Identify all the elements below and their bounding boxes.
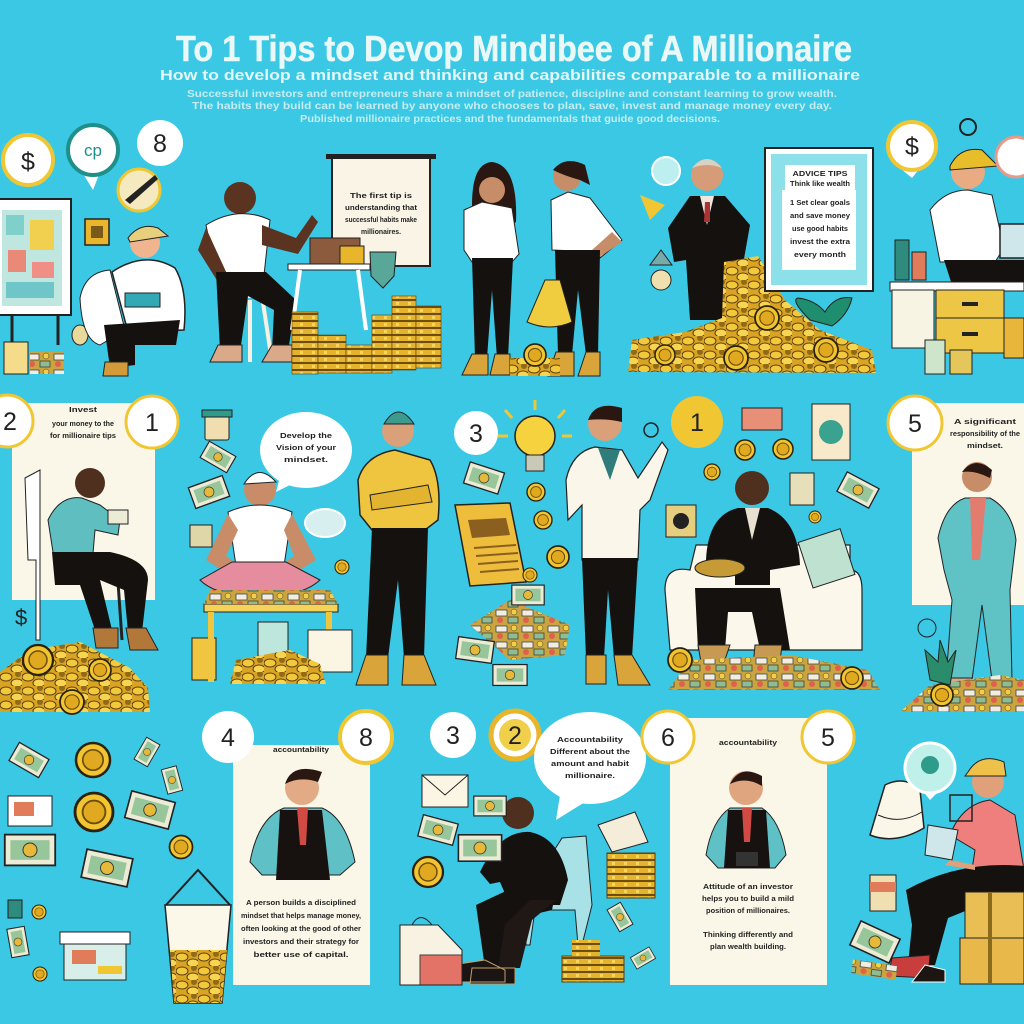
coins near women <box>510 344 560 376</box>
money around sofa <box>666 404 880 690</box>
panel: row 2 tip 1, reading man on chair <box>0 395 178 650</box>
table with coins <box>192 590 352 684</box>
badge: 5 <box>802 711 854 763</box>
flipchart with tip text: successful habits make <box>345 217 417 224</box>
desk with drawers <box>890 240 1024 374</box>
badge: 1 yellow <box>644 396 723 448</box>
badge: number 8: 8 <box>153 130 167 158</box>
badge: 3 row 3: 3 <box>446 722 460 750</box>
person: man in vest with phone <box>706 771 786 868</box>
person: man in vest <box>250 769 355 880</box>
person: man pointing on stool <box>198 182 318 362</box>
newspaper <box>455 503 526 586</box>
speech bubble: row 2: Develop the <box>280 433 332 440</box>
intro paragraph: Successful investors and entrepreneurs share a mindset of patience, discipline and constant learning to grow wealth. <box>187 88 837 100</box>
panel heading: accountability <box>719 740 777 747</box>
badge: 5 <box>888 396 942 450</box>
person: man in yellow sweater <box>356 412 439 685</box>
flipchart with tip text <box>326 154 436 266</box>
panel text: helps you to build a mild <box>702 896 794 903</box>
shopping bag <box>400 918 462 985</box>
badge: dollar: $ <box>21 148 35 176</box>
panel: row 3 tip 5 <box>642 711 854 985</box>
panel text: position of millionaires. <box>706 908 790 915</box>
panel text: mindset that helps manage money, <box>241 913 361 920</box>
panel: row 2 tip 5, man in teal suit <box>888 396 1024 690</box>
panel text: Thinking differently and <box>703 932 793 939</box>
plants and pile: right <box>900 619 1024 712</box>
coin pile with plant <box>628 256 876 373</box>
poster with checklist: Think like wealth <box>790 181 850 188</box>
table with books and shield <box>288 238 396 330</box>
badge: 5: 5 <box>908 410 922 438</box>
badge: speech coin <box>68 125 118 190</box>
person: seated man in suit <box>452 797 592 984</box>
intro paragraph: Published millionaire practices and the fundamentals that guide good decisions. <box>300 113 720 125</box>
panel: row 3 tip 8 <box>202 711 392 985</box>
badge: 2: 2 <box>3 408 17 436</box>
speech bubble: row 2: Vision of your <box>276 445 336 452</box>
panel text: plan wealth building. <box>710 944 786 951</box>
badge: 4: 4 <box>221 724 235 752</box>
panel text: Attitude of an investor <box>703 884 793 891</box>
person: man with laptop at desk <box>930 149 1024 290</box>
chart board <box>0 199 71 345</box>
panel text <box>950 419 1020 450</box>
flipchart with tip text: understanding that <box>345 205 418 212</box>
coin stacks <box>292 296 441 374</box>
speech bubble: row 2: mindset. <box>284 457 328 464</box>
badge: 2 <box>0 395 33 447</box>
bucket of coins <box>165 870 231 1003</box>
storage box <box>60 932 130 980</box>
badge: 6 <box>642 711 694 763</box>
subtitle: How to develop a mindset and thinking and capabilities comparable to a millionaire <box>160 67 860 84</box>
panel text: better use of capital. <box>254 952 349 959</box>
person: man in black suit <box>668 159 750 320</box>
person: seated man in cap <box>80 226 185 376</box>
badges: top right <box>888 119 1024 178</box>
badge: 8: 8 <box>359 724 373 752</box>
intro paragraph: The habits they build can be learned by anyone who chooses to plan, save, invest and manage money every day. <box>192 100 832 112</box>
badge: 3: 3 <box>469 420 483 448</box>
badge: 2 yellow ring <box>491 711 539 759</box>
coin pile: row 2 left <box>0 605 150 714</box>
badge: 2 yellow ring: 2 <box>508 722 522 750</box>
panel text: investors and their strategy for <box>243 939 359 946</box>
panel text <box>50 407 116 440</box>
badge: 8 <box>340 711 392 763</box>
icon: lightbulb <box>498 400 572 471</box>
panel text: for millionaire tips <box>50 433 116 440</box>
poster with checklist: 1 Set clear goals <box>790 200 850 207</box>
badge: 5: 5 <box>821 724 835 752</box>
badges: top right: $ <box>905 133 919 161</box>
poster with checklist: every month <box>794 252 846 259</box>
money: row 3 left <box>5 737 192 981</box>
person: woman with long hair <box>462 162 519 375</box>
intro paragraph <box>187 88 837 125</box>
lamp, badge and desk items <box>850 743 972 980</box>
stool <box>226 296 272 362</box>
poster with checklist <box>765 148 873 291</box>
panel text: A person builds a disciplined <box>246 900 356 907</box>
flipchart with tip text: millionaires. <box>361 229 401 236</box>
stacked boxes <box>960 892 1024 984</box>
badge: 1 <box>126 396 178 448</box>
person: man on boxes with laptop <box>888 759 1024 982</box>
badge: 6: 6 <box>661 724 675 752</box>
badge: dollar <box>3 135 53 185</box>
person: man in white sweater <box>566 406 668 685</box>
floating bills <box>188 410 349 574</box>
panel text: mindset. <box>967 443 1003 450</box>
speech bubble: row 3: Accountability <box>557 737 623 744</box>
poster with checklist: invest the extra <box>790 239 850 246</box>
small icons above pile <box>640 157 680 290</box>
speech bubble: row 3: Different about the <box>550 749 630 756</box>
poster with checklist: ADVICE TIPS <box>792 171 848 178</box>
badge: 4 <box>202 711 254 763</box>
badge: 3 <box>454 411 498 455</box>
badge: number 8 <box>137 120 183 166</box>
panel text: Invest <box>69 407 98 414</box>
person: man in teal suit <box>938 462 1016 690</box>
coin pile: row 2 left: $ <box>15 605 27 630</box>
person: cross-legged man on table <box>200 472 320 595</box>
title: To 1 Tips to Devop Mindibee of A Millionaire <box>176 28 852 69</box>
panel text: responsibility of the <box>950 431 1020 438</box>
panel text: A significant <box>954 419 1017 426</box>
poster with checklist: use good habits <box>792 226 848 233</box>
envelopes, bills and coin stacks <box>413 775 656 982</box>
header <box>160 28 860 125</box>
icon: small document <box>85 219 109 245</box>
speech bubble: row 3: amount and habit <box>551 761 630 768</box>
flipchart with tip text: The first tip is <box>350 193 412 200</box>
panel text: often looking at the good of other <box>241 926 361 933</box>
badge: 3 row 3 <box>430 712 476 758</box>
panel text <box>241 900 361 959</box>
badge: 1: 1 <box>145 409 159 437</box>
speech bubble: row 3: millionaire. <box>565 773 615 780</box>
clutter: jar and coins <box>4 325 88 374</box>
panel text <box>702 884 794 951</box>
poster with checklist: and save money <box>790 213 850 220</box>
badge: 1 yellow: 1 <box>690 409 704 437</box>
coins and bills around newspaper <box>456 462 570 685</box>
speech bubble: row 3 <box>534 712 646 820</box>
person: man in suit on sofa <box>665 471 862 678</box>
person: reading man on chair <box>25 468 158 650</box>
panel heading: accountability <box>273 747 329 754</box>
panel text: your money to the <box>52 421 114 428</box>
badge: speech coin: cp <box>84 141 102 160</box>
person: woman with yellow bag <box>527 161 622 376</box>
badge: pen <box>118 169 160 211</box>
speech bubble: row 2 <box>260 412 352 492</box>
